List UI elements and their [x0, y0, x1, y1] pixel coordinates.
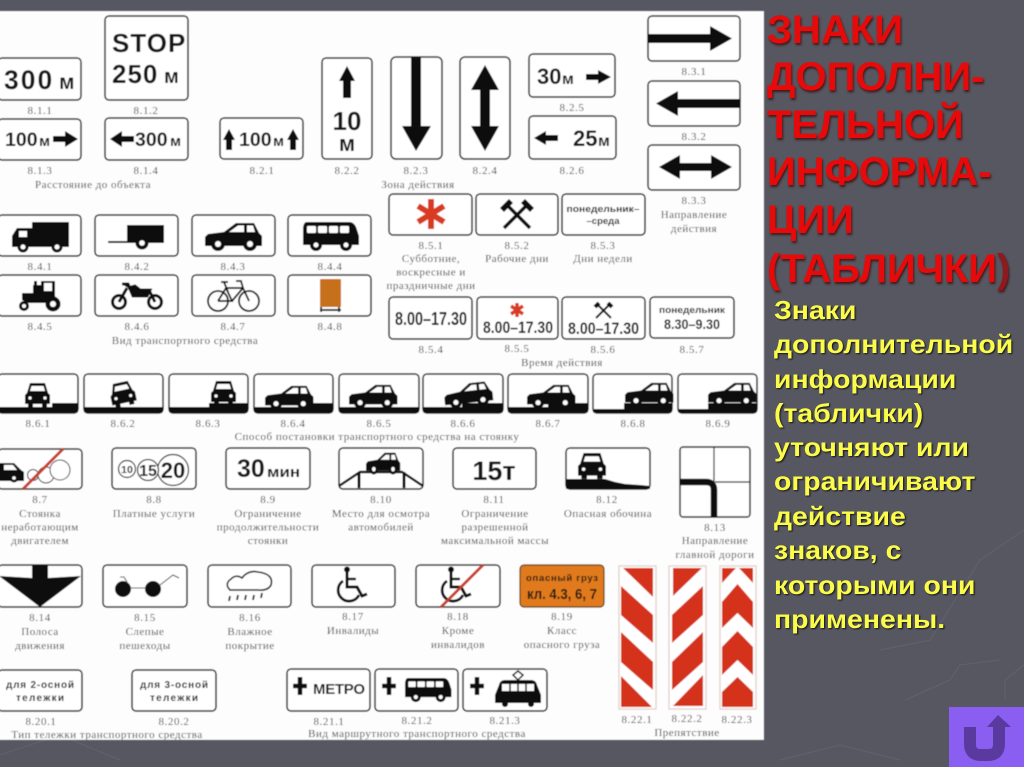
sign 8.9: 8.9	[260, 494, 276, 506]
sign 8.4.7: 8.4.7	[220, 321, 246, 333]
sign 8.5.6: 8.00–17.30	[568, 319, 639, 338]
sign 8.7: двигателем	[11, 535, 69, 547]
sign 8.1.3: м	[39, 133, 50, 150]
sign 8.2.3: 8.2.3	[404, 165, 428, 177]
sign 8.3.2: 8.3.2	[682, 131, 706, 143]
sign 8.3.2	[648, 81, 740, 143]
text block: description: уточняют или	[774, 433, 969, 462]
sign 8.5.2: 8.5.2	[504, 240, 530, 252]
sign 8.8: 20	[161, 458, 185, 483]
sign 8.22.3	[720, 566, 756, 726]
sign 8.15: пешеходы	[119, 640, 171, 652]
sign 8.1.3	[0, 119, 81, 177]
sign 8.4.7	[192, 275, 275, 333]
sign 8.6.7	[508, 374, 588, 430]
sign 8.11: максимальной массы	[441, 535, 549, 547]
sign 8.6.2: 8.6.2	[110, 418, 136, 430]
caption: route vehicle type: Вид маршрутного транспортного средства	[308, 728, 526, 740]
text block: description: действие	[774, 502, 906, 531]
sign 8.16	[208, 565, 291, 652]
sign 8.5.3: Дни недели	[573, 253, 633, 265]
sign 8.16: покрытие	[225, 640, 275, 652]
sign 8.7: неработающим	[1, 522, 79, 534]
caption: direction of action: Направление	[661, 209, 727, 221]
sign 8.5.6: 8.5.6	[590, 344, 616, 356]
sign 8.12	[564, 448, 652, 520]
caption: direction of action: действия	[671, 223, 717, 235]
sign 8.1.3: 100	[5, 129, 38, 151]
sign 8.20.1: тележки	[16, 693, 64, 704]
sign 8.2.1: 8.2.1	[250, 165, 274, 177]
sign 8.17	[312, 565, 395, 637]
sign 8.4.5	[0, 275, 81, 333]
sign 8.2.1: м	[273, 133, 284, 150]
caption: parking method: Способ постановки транспортного средства на стоянку	[235, 431, 519, 443]
panel: sign table	[0, 11, 764, 741]
sign 8.21.3: 8.21.3	[489, 715, 521, 727]
caption: vehicle type: Вид транспортного средства	[112, 335, 258, 347]
sign 8.4.2: 8.4.2	[124, 261, 150, 273]
sign 8.2.5: 30	[537, 64, 561, 89]
sign 8.6.4	[254, 374, 333, 430]
sign 8.7	[0, 449, 82, 547]
sign 8.21.1: 8.21.1	[313, 716, 345, 728]
sign 8.20.2: тележки	[150, 693, 198, 704]
sign 8.5.3: 8.5.3	[590, 240, 616, 252]
text block: description	[774, 296, 1013, 634]
sign 8.14	[0, 565, 82, 652]
sign 8.22.1	[619, 566, 656, 726]
sign 8.5.7: понедельник	[659, 305, 725, 316]
sign 8.9	[217, 448, 319, 547]
sign 8.4.4	[288, 215, 371, 273]
sign 8.4.1	[0, 215, 81, 273]
sign 8.13: Направление	[682, 535, 748, 547]
sign 8.2.1: 100	[239, 129, 272, 151]
sign 8.4.1: 8.4.1	[28, 261, 52, 273]
sign 8.6.7: 8.6.7	[536, 418, 560, 430]
sign 8.6.9	[678, 374, 757, 430]
sign 8.1.1: м	[59, 71, 75, 94]
sign 8.9: Ограничение	[234, 508, 302, 520]
sign 8.1.3: 8.1.3	[28, 165, 52, 177]
sign 8.1.1	[0, 58, 81, 117]
sign 8.19: опасного груза	[524, 639, 600, 651]
sign 8.13	[675, 447, 755, 561]
sign 8.9: стоянки	[248, 535, 288, 547]
sign 8.4.6	[95, 275, 178, 333]
sign 8.4.3	[192, 215, 275, 273]
icon: return button	[949, 707, 1024, 767]
sign 8.19: Класс	[547, 625, 577, 637]
sign 8.4.8: 8.4.8	[318, 321, 342, 333]
sign 8.19: 8.19	[551, 611, 573, 623]
text block: description: которыми они	[774, 571, 975, 600]
sign 8.2.3	[391, 57, 442, 177]
sign 8.6.1	[0, 374, 78, 430]
sign 8.2.2: 10	[333, 106, 361, 136]
caption: time of action: Время действия	[521, 357, 603, 369]
sign 8.11	[441, 448, 549, 547]
sign 8.20.2: 8.20.2	[158, 716, 190, 728]
sign 8.6.3: 8.6.3	[196, 418, 220, 430]
sign 8.10: автомобилей	[348, 522, 414, 534]
sign 8.4.8	[288, 275, 371, 333]
sign 8.2.2: м	[339, 131, 355, 156]
sign 8.10	[332, 448, 430, 534]
sign 8.5.3: понедельник–	[566, 204, 640, 215]
sign 8.20.1: 8.20.1	[25, 716, 57, 728]
caption: action zone: Зона действия	[381, 179, 455, 191]
sign 8.18: Кроме	[442, 625, 474, 637]
text block: description: информации	[774, 365, 956, 394]
sign 8.19	[520, 565, 604, 651]
sign 8.8: 10	[121, 464, 133, 476]
sign 8.2.5: 8.2.5	[560, 102, 584, 114]
title: ДОПОЛНИ-	[767, 55, 984, 99]
caption: distance to object: Расстояние до объекта	[35, 179, 151, 191]
sign 8.5.1: Субботние,	[402, 253, 460, 265]
sign 8.19: опасный груз	[526, 573, 598, 584]
sign 8.5.5: 8.5.5	[504, 343, 530, 355]
text block: description: дополнительной	[774, 330, 1013, 359]
sign 8.11: разрешенной	[461, 522, 529, 534]
sign 8.21.1	[287, 669, 370, 728]
sign 8.5.4: 8.5.4	[418, 344, 444, 356]
sign 8.5.3: –среда	[587, 216, 620, 227]
sign 8.5.3	[562, 194, 645, 265]
sign 8.6.8	[593, 374, 673, 430]
sign 8.21.2: 8.21.2	[401, 715, 433, 727]
sign 8.5.2: Рабочие дни	[485, 253, 549, 265]
text block: description: знаков, с	[774, 536, 901, 565]
sign 8.2.6: 8.2.6	[560, 165, 584, 177]
sign 8.1.2: 8.1.2	[134, 105, 158, 117]
sign 8.6.9: 8.6.9	[706, 418, 730, 430]
sign 8.9: продолжительности	[217, 522, 319, 534]
sign 8.2.4: 8.2.4	[472, 165, 498, 177]
sign 8.22.2	[669, 566, 706, 725]
sign 8.14: 8.14	[29, 612, 51, 624]
sign 8.18	[416, 565, 500, 651]
sign 8.6.1: 8.6.1	[26, 418, 50, 430]
title: (ТАБЛИЧКИ)	[767, 247, 1010, 291]
sign 8.8: 8.8	[146, 494, 162, 506]
sign 8.4.4: 8.4.4	[318, 261, 342, 273]
sign 8.1.4: м	[170, 133, 181, 150]
sign 8.5.7	[650, 297, 734, 356]
sign 8.20.2: для 3-осной	[140, 680, 208, 691]
sign 8.13: главной дороги	[675, 549, 755, 561]
title	[767, 8, 1010, 291]
sign 8.6.3	[169, 374, 248, 430]
sign 8.2.6	[529, 116, 616, 177]
sign 8.7: Стоянка	[19, 508, 61, 520]
text block: description: применены.	[774, 605, 945, 634]
sign 8.11: 8.11	[483, 494, 505, 506]
sign 8.2.2	[322, 58, 372, 177]
sign 8.15	[103, 565, 187, 652]
sign 8.11: Ограничение	[461, 508, 529, 520]
sign 8.5.2	[476, 194, 558, 265]
title: ЦИИ	[767, 198, 854, 242]
text block: description: Знаки	[774, 296, 856, 325]
sign 8.20.1	[0, 670, 82, 728]
sign 8.6.5	[339, 374, 419, 430]
sign 8.1.1: 8.1.1	[28, 105, 52, 117]
caption: trolley type: Тип тележки транспортного средства	[11, 729, 203, 741]
sign 8.2.5: м	[562, 71, 574, 88]
sign 8.15: Слепые	[126, 626, 164, 638]
sign 8.2.1	[220, 118, 303, 177]
sign 8.1.2	[105, 16, 188, 117]
sign 8.1.4	[105, 118, 188, 177]
sign 8.22.1: 8.22.1	[621, 714, 653, 726]
sign 8.3.3	[648, 145, 740, 207]
sign 8.17: 8.17	[342, 611, 364, 623]
sign 8.14: Полоса	[21, 626, 59, 638]
sign 8.20.1: для 2-осной	[6, 680, 74, 691]
sign 8.12: 8.12	[596, 494, 618, 506]
sign 8.3.3: 8.3.3	[682, 195, 706, 207]
sign 8.22.3: 8.22.3	[721, 714, 753, 726]
sign 8.19: кл. 4.3, 6, 7	[527, 586, 597, 603]
caption: obstacle: Препятствие	[654, 727, 720, 739]
sign 8.16: 8.16	[239, 612, 261, 624]
sign 8.1.2: 250	[112, 59, 158, 89]
sign 8.5.7: 8.30–9.30	[664, 317, 720, 332]
sign 8.2.6: м	[598, 133, 610, 150]
sign 8.12: Опасная обочина	[564, 508, 652, 520]
sign 8.16: Влажное	[227, 626, 273, 638]
sign 8.20.2	[132, 670, 216, 728]
sign 8.17: Инвалиды	[327, 625, 379, 637]
sign 8.11: 15т	[472, 456, 516, 486]
sign 8.5.5: 8.00–17.30	[483, 318, 553, 337]
sign 8.4.3: 8.4.3	[220, 261, 246, 273]
sign 8.6.8: 8.6.8	[620, 418, 646, 430]
sign 8.1.2: м	[164, 66, 179, 88]
sign 8.5.5	[477, 297, 558, 355]
sign 8.1.4: 300	[135, 129, 168, 151]
sign 8.7: 8.7	[32, 494, 48, 506]
sign 8.5.1: праздничные дни	[386, 280, 476, 292]
sign 8.5.6	[562, 297, 645, 356]
text block: description: (таблички)	[774, 399, 923, 428]
sign 8.9: мин	[267, 464, 300, 481]
sign 8.21.2	[375, 669, 458, 727]
sign 8.6.4: 8.6.4	[280, 418, 306, 430]
title: ЗНАКИ	[767, 8, 903, 52]
sign 8.1.1: 300	[4, 65, 54, 95]
sign 8.10: Место для осмотра	[332, 508, 430, 520]
title: ИНФОРМА-	[767, 150, 992, 194]
sign 8.18: инвалидов	[431, 639, 485, 651]
title: ТЕЛЬНОЙ	[767, 101, 964, 147]
sign 8.4.6: 8.4.6	[124, 321, 150, 333]
sign 8.8	[112, 448, 196, 520]
sign 8.21.3	[463, 669, 547, 727]
sign 8.21.1: МЕТРО	[313, 681, 365, 698]
sign 8.10: 8.10	[370, 494, 392, 506]
sign 8.14: движения	[15, 640, 65, 652]
sign 8.3.1: 8.3.1	[682, 66, 706, 78]
sign 8.1.4: 8.1.4	[134, 165, 158, 177]
sign 8.5.4: 8.00–17.30	[395, 309, 467, 329]
sign 8.4.5: 8.4.5	[28, 321, 52, 333]
sign 8.13: 8.13	[704, 522, 726, 534]
sign 8.5.1: 8.5.1	[418, 240, 444, 252]
text block: description: ограничивают	[774, 467, 975, 496]
sign 8.22.2: 8.22.2	[671, 713, 703, 725]
sign 8.15: 8.15	[134, 612, 156, 624]
sign 8.2.4	[460, 57, 510, 177]
sign 8.5.7: 8.5.7	[680, 344, 704, 356]
sign 8.4.2	[95, 215, 178, 273]
sign 8.5.1	[386, 194, 476, 292]
sign 8.6.6	[423, 374, 503, 430]
sign 8.6.5: 8.6.5	[366, 418, 392, 430]
sign 8.9: 30	[237, 455, 265, 483]
sign 8.2.2: 8.2.2	[334, 165, 360, 177]
sign 8.5.1: воскресные и	[396, 266, 466, 278]
sign 8.6.6: 8.6.6	[450, 418, 476, 430]
sign 8.2.6: 25	[573, 126, 597, 151]
sign 8.2.5	[529, 54, 615, 114]
sign 8.8: Платные услуги	[113, 508, 195, 520]
sign 8.5.4	[389, 297, 472, 356]
sign 8.3.1	[648, 16, 740, 78]
sign 8.6.2	[84, 374, 163, 430]
sign 8.8: 15	[139, 463, 157, 480]
sign 8.1.2: STOP	[112, 28, 186, 58]
sign 8.18: 8.18	[447, 611, 469, 623]
